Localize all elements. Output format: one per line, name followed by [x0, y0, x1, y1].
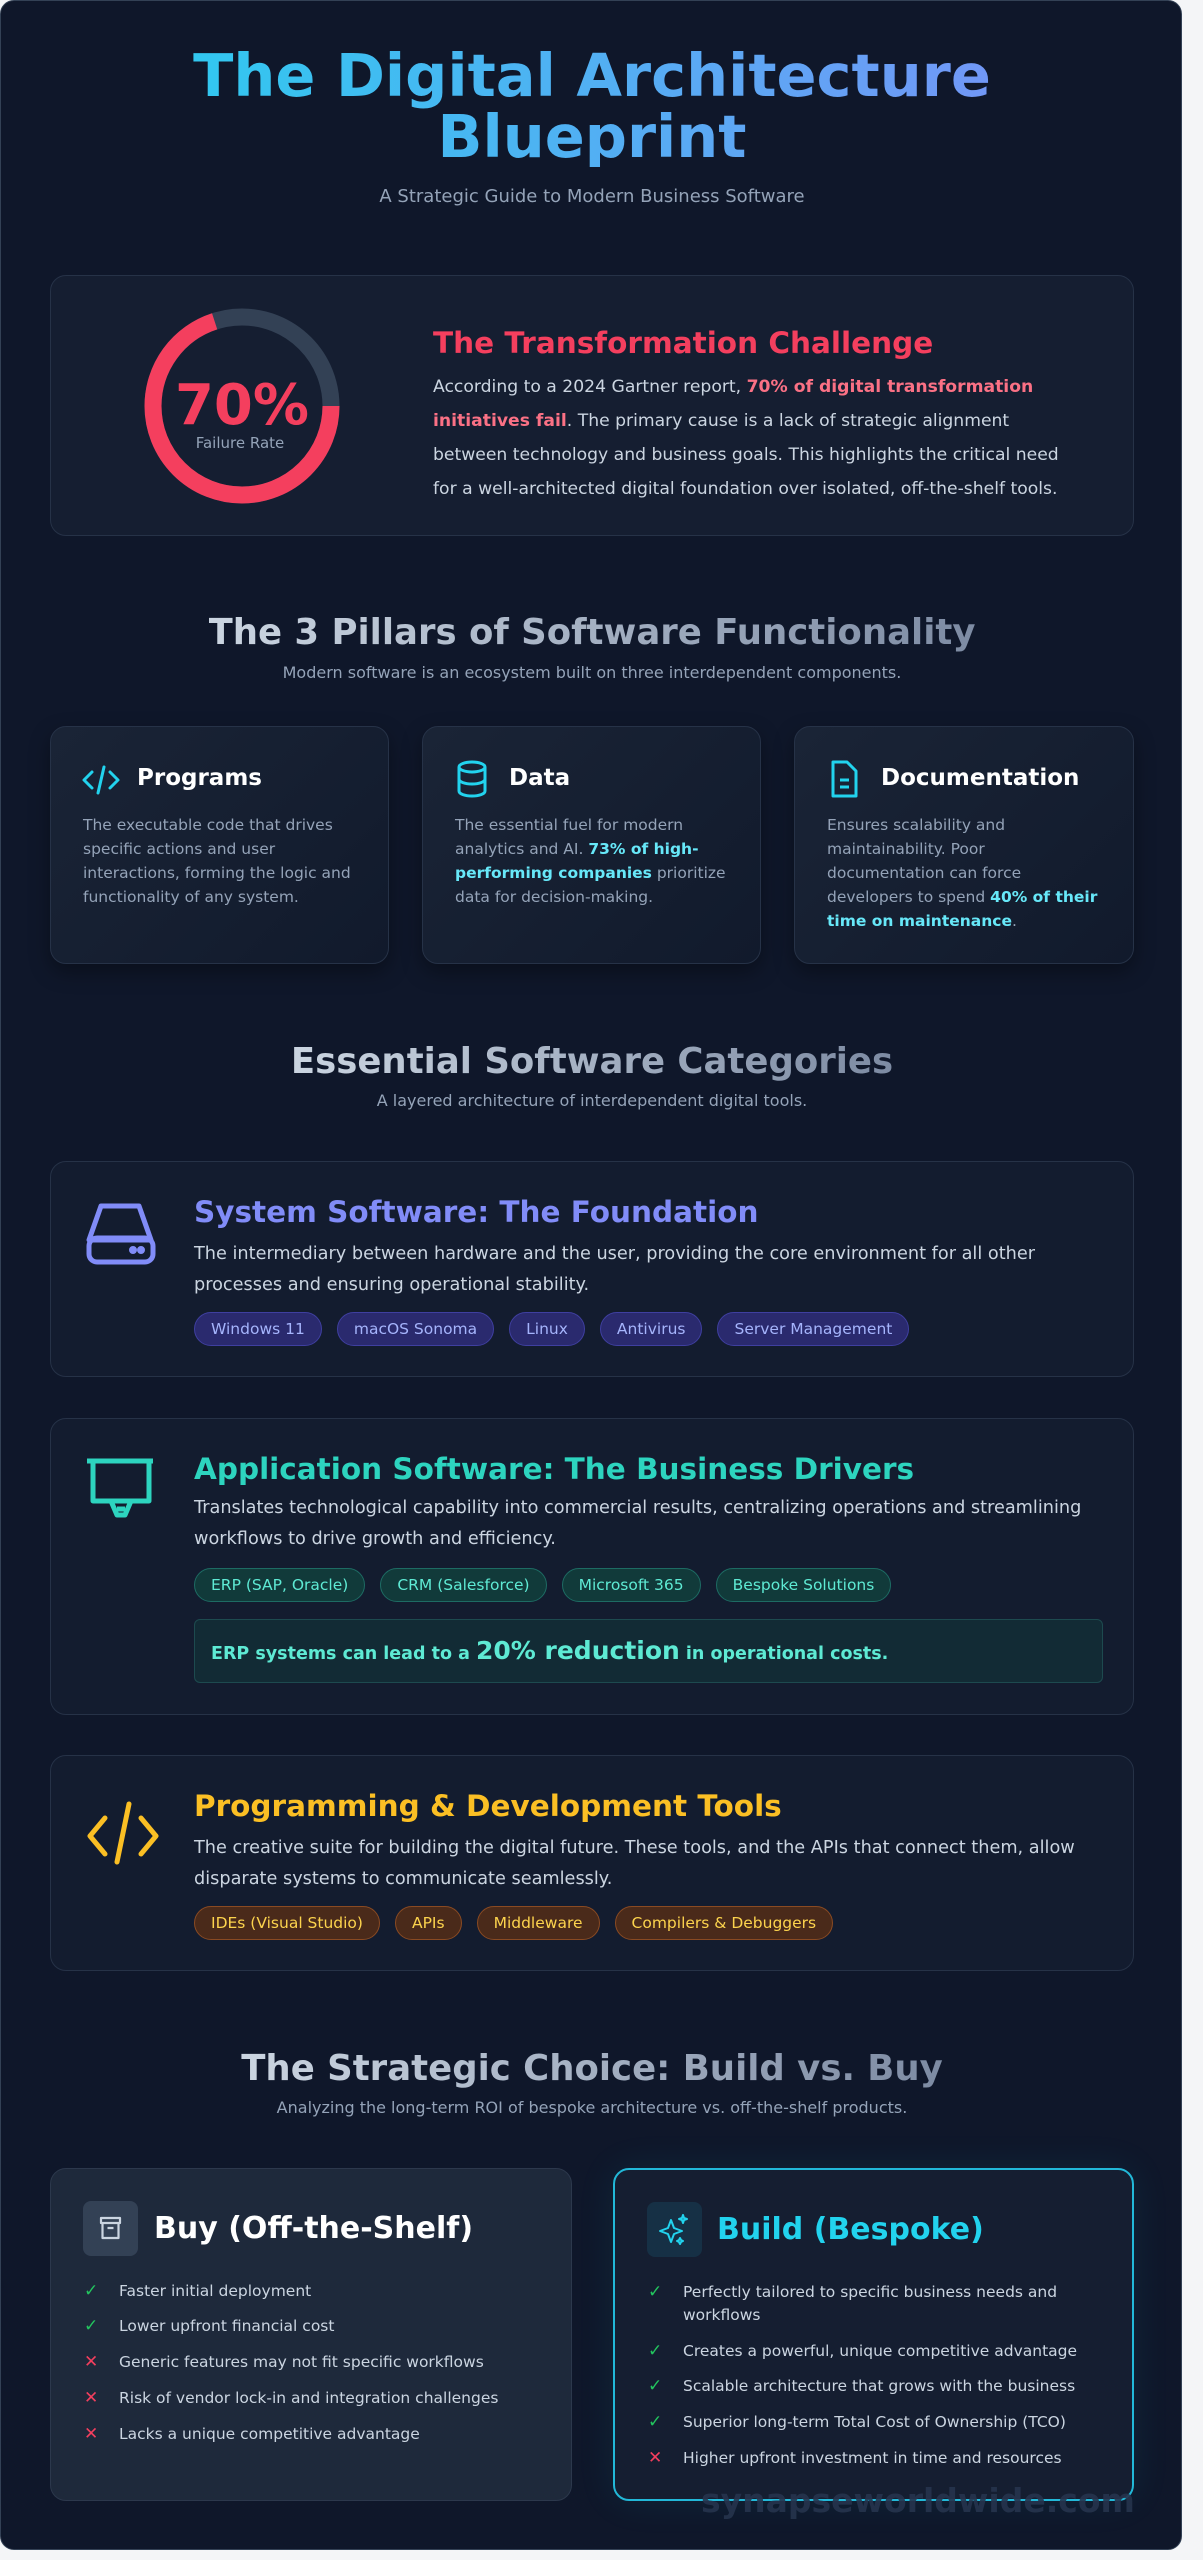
icon: code	[82, 766, 120, 794]
description	[194, 1838, 1075, 1889]
title: The Digital Architecture	[193, 41, 991, 110]
icon: sparkles	[647, 2202, 702, 2257]
tags: Linux	[526, 1320, 568, 1338]
icon: code	[87, 1802, 159, 1864]
list: ✕	[84, 2352, 98, 2372]
list: Perfectly tailored to specific business needs and	[683, 2283, 1057, 2301]
text block: for a well-architected digital foundation over isolated, off-the-shelf tools.	[433, 479, 1057, 499]
text	[827, 816, 1098, 930]
list: ✕	[648, 2448, 662, 2468]
text block	[433, 377, 1059, 499]
heading: build vs buy: The Strategic Choice: Build vs. Buy	[241, 2048, 943, 2089]
list: ✓	[84, 2316, 98, 2336]
description	[194, 1498, 1081, 1549]
tags: APIs	[412, 1914, 445, 1932]
callout: ERP stat	[194, 1619, 1103, 1683]
description: processes and ensuring operational stability.	[194, 1275, 589, 1295]
description: disparate systems to communicate seamlessly.	[194, 1869, 612, 1889]
text: The essential fuel for modern	[455, 816, 683, 834]
subheading: A layered architecture of interdependent digital tools.	[377, 1091, 807, 1110]
title	[1, 45, 1183, 167]
title: Application Software: The Business Drivers	[194, 1452, 914, 1486]
icon: box	[83, 2201, 138, 2256]
title: System Software: The Foundation	[194, 1195, 759, 1229]
subtitle: A Strategic Guide to Modern Business Software	[379, 186, 805, 207]
subheading: Modern software is an ecosystem built on three interdependent components.	[283, 663, 901, 682]
panel: system software	[50, 1161, 1134, 1377]
text: analytics and AI. 73% of high-	[455, 840, 699, 858]
donut chart 70%: 70%	[175, 373, 309, 438]
tags: Middleware	[494, 1914, 583, 1932]
list: Faster initial deployment	[119, 2282, 311, 2300]
tags: Compilers & Debuggers	[632, 1914, 816, 1932]
text block: According to a 2024 Gartner report, 70% of digital transformation	[433, 377, 1033, 397]
watermark: synapseworldwide.com	[701, 2481, 1135, 2520]
text: specific actions and user	[83, 840, 275, 858]
text: maintainability. Poor	[827, 840, 985, 858]
list: Risk of vendor lock-in and integration challenges	[119, 2389, 498, 2407]
list: ✓	[648, 2412, 662, 2432]
list: ✓	[648, 2282, 662, 2302]
list: Lacks a unique competitive advantage	[119, 2425, 420, 2443]
icon: database	[458, 760, 486, 798]
title: Blueprint	[438, 102, 746, 171]
tags: Microsoft 365	[579, 1576, 684, 1594]
description: The intermediary between hardware and the user, providing the core environment for all other	[194, 1244, 1035, 1264]
tags	[194, 1312, 909, 1346]
icon: hard drive	[86, 1204, 156, 1264]
text: The executable code that drives	[83, 816, 333, 834]
panel: buy	[50, 2168, 572, 2501]
title: Data	[509, 765, 570, 791]
text block: between technology and business goals. This highlights the critical need	[433, 445, 1059, 465]
list	[84, 2281, 498, 2444]
panel: build	[613, 2168, 1134, 2501]
tags: macOS Sonoma	[354, 1320, 477, 1338]
list: Lower upfront financial cost	[119, 2317, 334, 2335]
text: developers to spend 40% of their	[827, 888, 1097, 906]
title: Programs	[137, 765, 262, 791]
icon: monitor	[87, 1458, 153, 1518]
donut chart 70%: Failure Rate	[196, 434, 284, 452]
title: Programming & Development Tools	[194, 1789, 782, 1823]
panel: transformation challenge	[50, 275, 1134, 536]
list: ✓	[648, 2376, 662, 2396]
list: ✓	[648, 2341, 662, 2361]
description: Translates technological capability into commercial results, centralizing operations and streamlining	[194, 1498, 1081, 1518]
list: Scalable architecture that grows with the business	[683, 2377, 1075, 2395]
text	[82, 816, 351, 906]
panel: programs	[50, 726, 389, 964]
tags: IDEs (Visual Studio)	[211, 1914, 363, 1932]
tags: ERP (SAP, Oracle)	[211, 1576, 348, 1594]
text: time on maintenance.	[827, 912, 1017, 930]
title: Documentation	[881, 765, 1079, 791]
text: documentation can force	[827, 864, 1021, 882]
text: performing companies prioritize	[455, 864, 726, 882]
description	[194, 1244, 1035, 1295]
list: Creates a powerful, unique competitive advantage	[683, 2342, 1077, 2360]
tags: Bespoke Solutions	[733, 1576, 874, 1594]
panel: application software	[50, 1418, 1134, 1715]
tags: CRM (Salesforce)	[397, 1576, 530, 1594]
tags: Windows 11	[211, 1320, 305, 1338]
panel: data	[422, 726, 761, 964]
list: workflows	[683, 2306, 761, 2324]
donut chart 70%	[144, 308, 340, 504]
list: ✓	[84, 2281, 98, 2301]
list: Generic features may not fit specific workflows	[119, 2353, 484, 2371]
text	[454, 816, 726, 906]
list: ✕	[84, 2388, 98, 2408]
title: Buy (Off-the-Shelf)	[154, 2211, 473, 2246]
text: Ensures scalability and	[827, 816, 1005, 834]
list: Higher upfront investment in time and resources	[683, 2449, 1062, 2467]
text block: initiatives fail. The primary cause is a lack of strategic alignment	[433, 411, 1009, 431]
heading: The Transformation Challenge	[433, 326, 933, 360]
list: Superior long-term Total Cost of Ownership (TCO)	[683, 2413, 1066, 2431]
title: Build (Bespoke)	[717, 2212, 984, 2247]
list: ✕	[84, 2424, 98, 2444]
text: data for decision-making.	[455, 888, 653, 906]
text: functionality of any system.	[83, 888, 299, 906]
tags	[194, 1568, 891, 1602]
callout: ERP stat: ERP systems can lead to a 20% reduction in operational costs.	[211, 1636, 888, 1665]
panel: documentation	[794, 726, 1134, 964]
panel: programming tools	[50, 1755, 1134, 1971]
list	[648, 2282, 1077, 2468]
heading: categories: Essential Software Categories	[291, 1041, 893, 1082]
tags: Antivirus	[617, 1320, 685, 1338]
subheading: Analyzing the long-term ROI of bespoke architecture vs. off-the-shelf products.	[277, 2098, 907, 2117]
heading: 3 pillars: The 3 Pillars of Software Functionality	[208, 612, 976, 653]
icon: document	[832, 760, 858, 798]
description: The creative suite for building the digital future. These tools, and the APIs that connect them, allow	[194, 1838, 1075, 1858]
tags: Server Management	[734, 1320, 892, 1338]
text: interactions, forming the logic and	[83, 864, 351, 882]
tags	[194, 1906, 833, 1940]
description: workflows to drive growth and efficiency.	[194, 1529, 556, 1549]
